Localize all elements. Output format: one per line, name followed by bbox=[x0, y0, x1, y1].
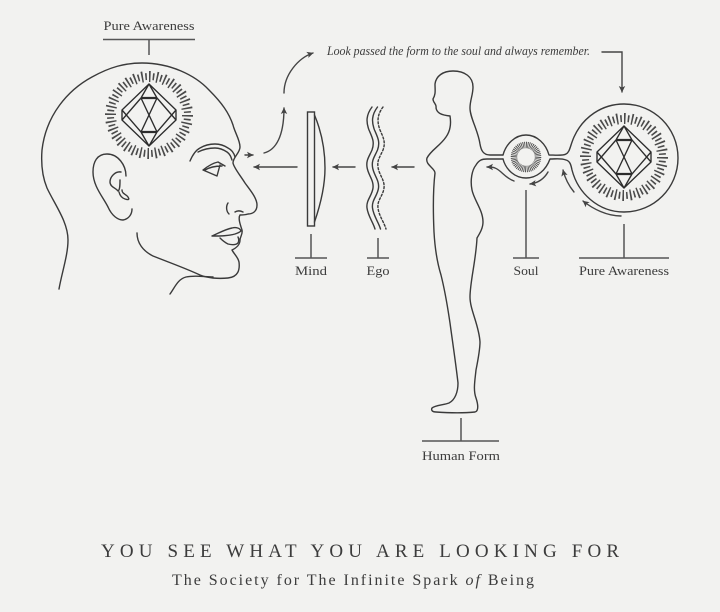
mind lens bbox=[308, 112, 325, 226]
label: ego: Ego bbox=[366, 264, 390, 278]
title: YOU SEE WHAT YOU ARE LOOKING FOR bbox=[101, 541, 619, 562]
arrows between ego and body bbox=[333, 166, 414, 168]
label: pure awareness (head) bbox=[103, 19, 195, 55]
ear bbox=[93, 154, 132, 220]
arrows from mind to head bbox=[245, 53, 313, 167]
neck front bbox=[170, 276, 213, 294]
eye bbox=[203, 162, 225, 176]
callout text: Look passed the form to the soul and always remember. bbox=[326, 44, 590, 58]
label: human form bbox=[422, 418, 500, 463]
lips bbox=[212, 228, 241, 245]
label: soul: Soul bbox=[514, 264, 539, 278]
icon: mandala in awareness circle bbox=[586, 118, 662, 196]
human form figure bbox=[427, 71, 503, 413]
icon: soul starburst bbox=[514, 145, 538, 169]
head profile bbox=[42, 63, 257, 294]
inner ear bbox=[110, 172, 129, 200]
head outline bbox=[42, 63, 257, 289]
soul and awareness vessel bbox=[503, 104, 678, 212]
nostril bbox=[227, 203, 243, 214]
arrow to pure awareness bbox=[602, 52, 622, 92]
label: human form: Human Form bbox=[422, 449, 500, 463]
eyebrow bbox=[190, 144, 235, 161]
label: ego bbox=[366, 238, 390, 278]
label: mind: Mind bbox=[295, 264, 328, 278]
label: soul bbox=[513, 190, 539, 278]
icon: mandala in head bbox=[110, 76, 188, 154]
label: mind bbox=[295, 234, 328, 278]
subtitle: The Society for The Infinite Spark of Being bbox=[172, 572, 534, 589]
ego wavy lines bbox=[367, 107, 386, 229]
label: pure awareness (head): Pure Awareness bbox=[104, 19, 195, 33]
label: pure awareness (right) bbox=[579, 224, 669, 278]
label: pure awareness (right): Pure Awareness bbox=[579, 264, 669, 278]
flow arrows below soul bbox=[487, 167, 621, 216]
